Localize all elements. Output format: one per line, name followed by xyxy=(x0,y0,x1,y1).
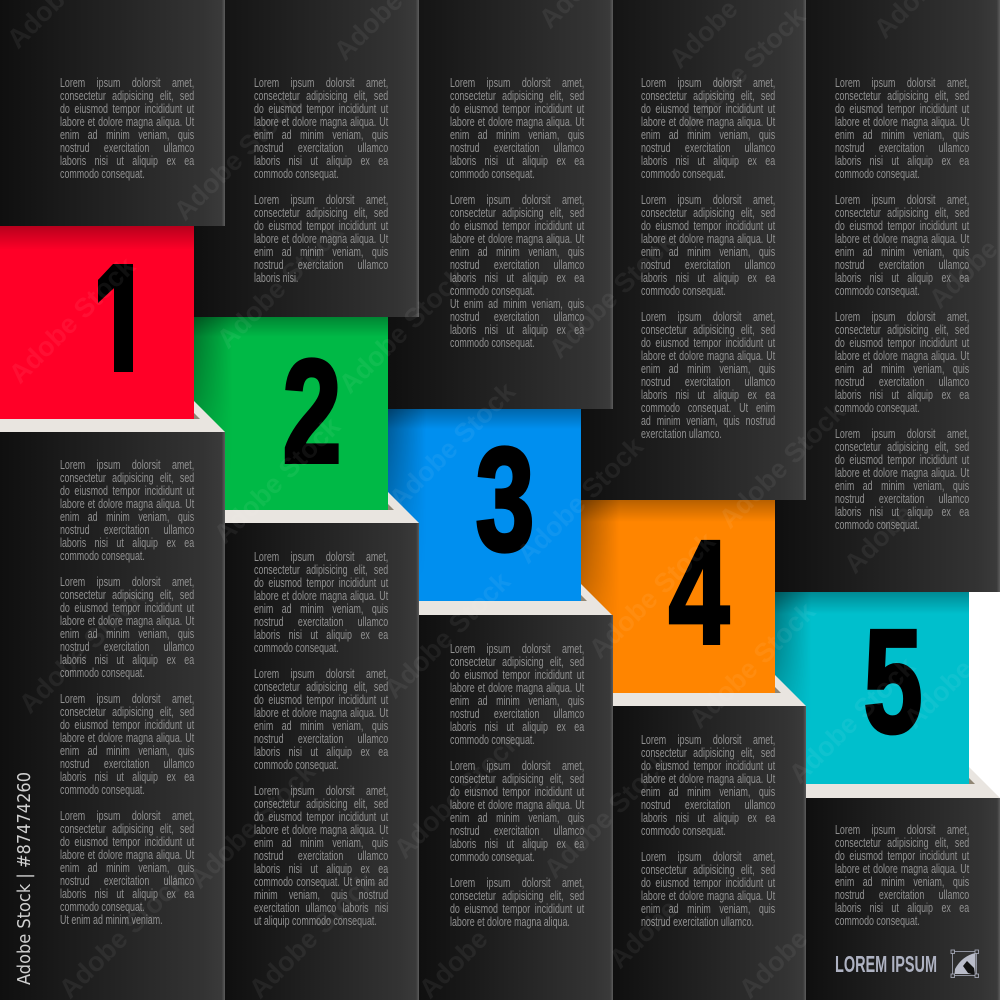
text: panel 4 top: labore et dolore magna aliqua. Ut xyxy=(641,232,775,246)
text: panel 1 top: laboris nisi ut aliquip ex ea xyxy=(60,154,194,168)
text: panel 2 bottom: minim veniam, quis nostrud xyxy=(254,888,388,902)
watermarks: Adobe Stock xyxy=(333,261,472,399)
text: panel 2 bottom: laboris nisi ut aliquip ex ea xyxy=(254,628,388,642)
text: panel 5 top: laboris nisi ut aliquip ex ea xyxy=(835,388,969,402)
top panel 2 xyxy=(194,0,419,317)
text: panel 4 top: nostrud exercitation ullamco xyxy=(641,141,775,155)
text: panel 1 bottom: nostrud exercitation ullamco xyxy=(60,522,194,536)
text: panel 1 bottom: laboris nisi ut aliquip ex ea xyxy=(60,536,194,550)
text: panel 2 top: enim ad minim veniam, quis xyxy=(254,245,388,259)
text: panel 3 bottom: Lorem ipsum dolorsit amet, xyxy=(450,876,584,890)
text: panel 4 top: do eiusmod tempor incididunt ut xyxy=(641,102,775,116)
text: panel 4 top: laboris nisi ut aliquip ex ea xyxy=(641,271,775,285)
text: panel 5 top: commodo consequat. xyxy=(835,284,920,298)
bottom panel 3 xyxy=(419,615,613,1000)
text: panel 2 top: consectetur adipisicing elit, sed xyxy=(254,89,388,103)
text: panel 4 bottom: consectetur adipisicing elit, sed xyxy=(641,862,775,876)
text: panel 3 bottom xyxy=(450,642,584,928)
step 1 column xyxy=(0,0,225,1000)
text: panel 2 bottom: commodo consequat. xyxy=(254,640,339,654)
text: panel 3 bottom: consectetur adipisicing elit, sed xyxy=(450,772,584,786)
text: panel 2 bottom: labore et dolore magna aliqua. Ut xyxy=(254,822,388,836)
watermarks: Adobe Stock xyxy=(783,651,922,789)
text: panel 4 bottom: consectetur adipisicing elit, sed xyxy=(641,746,775,760)
text: panel 3 bottom: enim ad minim veniam, quis xyxy=(450,810,584,824)
watermarks: Adobe Stock xyxy=(211,216,350,354)
text: panel 3 top: nostrud exercitation ullamco xyxy=(450,310,584,324)
text: panel 3 bottom: Lorem ipsum dolorsit amet, xyxy=(450,642,584,656)
number 2: 2 xyxy=(283,330,341,494)
white ledge 2 xyxy=(194,492,419,523)
text: panel 3 top: nostrud exercitation ullamco xyxy=(450,141,584,155)
text: panel 1 top: commodo consequat. xyxy=(60,167,145,181)
text: panel 4 bottom: do eiusmod tempor incididunt ut xyxy=(641,758,775,772)
number 1: 1 xyxy=(77,239,159,404)
text: panel 2 top: labore et dolore magna aliqua. Ut xyxy=(254,115,388,129)
text: panel 1 top: do eiusmod tempor incididunt ut xyxy=(60,102,194,116)
text: panel 3 bottom: enim ad minim veniam, quis xyxy=(450,694,584,708)
text: panel 5 top: nostrud exercitation ullamco xyxy=(835,492,969,506)
watermarks: Adobe Stock xyxy=(13,581,152,719)
text: panel 5 top: do eiusmod tempor incididunt ut xyxy=(835,336,969,350)
text: panel 2 bottom: commodo consequat. Ut enim ad xyxy=(254,874,388,888)
step 5 column xyxy=(775,0,1000,1000)
text: panel 5 bottom: do eiusmod tempor incididunt ut xyxy=(835,849,969,863)
text: panel 2 top: nostrud exercitation ullamco xyxy=(254,141,388,155)
text: panel 3 top: consectetur adipisicing elit, sed xyxy=(450,206,584,220)
text: panel 3 top: enim ad minim veniam, quis xyxy=(450,128,584,142)
text: panel 3 bottom: labore et dolore magna aliqua. xyxy=(450,914,570,928)
text: panel 1 bottom: nostrud exercitation ullamco xyxy=(60,756,194,770)
text: panel 3 top: commodo consequat. xyxy=(450,167,535,181)
text: panel 1 bottom: nostrud exercitation ullamco xyxy=(60,640,194,654)
text: panel 1 top: labore et dolore magna aliqua. Ut xyxy=(60,115,194,129)
white ledge 1 xyxy=(0,401,225,432)
text: panel 4 top: enim ad minim veniam, quis xyxy=(641,245,775,259)
text: panel 5 top: nostrud exercitation ullamco xyxy=(835,375,969,389)
text: panel 1 bottom: labore et dolore magna aliqua. Ut xyxy=(60,848,194,862)
text: panel 2 bottom: laboris nisi ut aliquip ex ea xyxy=(254,744,388,758)
text: panel 2 top xyxy=(254,76,388,285)
text: panel 4 bottom: labore et dolore magna aliqua. Ut xyxy=(641,888,775,902)
number 4: 4 xyxy=(669,511,729,675)
text: panel 2 top: commodo consequat. xyxy=(254,167,339,181)
text: panel 3 bottom: nostrud exercitation ullamco xyxy=(450,824,584,838)
text: panel 5 top: labore et dolore magna aliqua. Ut xyxy=(835,349,969,363)
text: panel 4 top: commodo consequat. Ut enim xyxy=(641,401,775,415)
vertical stock id: Adobe Stock | #87474260 xyxy=(14,772,35,985)
text: panel 1 bottom: labore et dolore magna aliqua. Ut xyxy=(60,496,194,510)
text: panel 4 bottom: laboris nisi ut aliquip ex ea xyxy=(641,810,775,824)
text: panel 4 bottom: do eiusmod tempor incididunt ut xyxy=(641,876,775,890)
text: panel 1 bottom: enim ad minim veniam, quis xyxy=(60,860,194,874)
white ledge 4 xyxy=(581,675,806,706)
text: panel 2 bottom: consectetur adipisicing elit, sed xyxy=(254,796,388,810)
text: panel 5 top: consectetur adipisicing elit, sed xyxy=(835,323,969,337)
text: panel 1 top xyxy=(60,76,194,181)
text: panel 5 top: nostrud exercitation ullamco xyxy=(835,141,969,155)
text: panel 5 top: Lorem ipsum dolorsit amet, xyxy=(835,310,969,324)
text: panel 1 bottom: Lorem ipsum dolorsit amet, xyxy=(60,458,194,472)
text: panel 2 bottom: enim ad minim veniam, quis xyxy=(254,718,388,732)
watermarks: Adobe Stock xyxy=(683,596,822,734)
text: panel 5 bottom: commodo consequat. xyxy=(835,914,920,928)
text: panel 2 top: labore et dolore magna aliqua. Ut xyxy=(254,232,388,246)
watermarks: Adobe Stock xyxy=(538,746,677,884)
text: panel 5 top: do eiusmod tempor incididunt ut xyxy=(835,102,969,116)
text: panel 1 bottom: enim ad minim veniam, quis xyxy=(60,510,194,524)
white ledge 5 xyxy=(775,767,1000,798)
text: panel 4 top: Lorem ipsum dolorsit amet, xyxy=(641,193,775,207)
text: panel 5 top: enim ad minim veniam, quis xyxy=(835,362,969,376)
text: panel 5 top: consectetur adipisicing elit, sed xyxy=(835,440,969,454)
text: panel 5 bottom: consectetur adipisicing elit, sed xyxy=(835,836,969,850)
text: panel 5 top: commodo consequat. xyxy=(835,518,920,532)
text: panel 3 top: Lorem ipsum dolorsit amet, xyxy=(450,76,584,90)
text: panel 2 bottom: laboris nisi ut aliquip ex ea xyxy=(254,862,388,876)
watermarks: Adobe xyxy=(603,894,684,974)
step 3 column xyxy=(388,0,613,1000)
bottom panel 4 xyxy=(612,706,806,1000)
text: panel 5 top: consectetur adipisicing elit, sed xyxy=(835,206,969,220)
text: panel 2 bottom: consectetur adipisicing elit, sed xyxy=(254,680,388,694)
text: panel 2 bottom xyxy=(254,550,388,928)
text: panel 2 top: nostrud exercitation ullamco xyxy=(254,258,388,272)
text: panel 1 bottom: enim ad minim veniam, quis xyxy=(60,626,194,640)
bottom panel 2 xyxy=(225,523,419,1000)
text: panel 3 bottom: Lorem ipsum dolorsit amet, xyxy=(450,758,584,772)
text: panel 4 top: labore et dolore magna aliqua. Ut xyxy=(641,115,775,129)
text: panel 4 top: consectetur adipisicing elit, sed xyxy=(641,323,775,337)
text: panel 5 top xyxy=(835,76,970,532)
text: panel 1 bottom: commodo consequat. xyxy=(60,548,145,562)
text: panel 2 bottom: consectetur adipisicing elit, sed xyxy=(254,562,388,576)
text: panel 3 bottom: labore et dolore magna aliqua. Ut xyxy=(450,680,584,694)
text: panel 2 bottom: do eiusmod tempor incididunt ut xyxy=(254,576,388,590)
text: panel 3 bottom: laboris nisi ut aliquip ex ea xyxy=(450,720,584,734)
text: panel 3 top: Lorem ipsum dolorsit amet, xyxy=(450,193,584,207)
text: panel 3 bottom: laboris nisi ut aliquip ex ea xyxy=(450,836,584,850)
watermarks: Adobe Stock xyxy=(168,88,307,226)
text: panel 2 top: enim ad minim veniam, quis xyxy=(254,128,388,142)
text: panel 5 top: enim ad minim veniam, quis xyxy=(835,479,969,493)
text: panel 3 top: do eiusmod tempor incididunt ut xyxy=(450,219,584,233)
text: panel 2 bottom: exercitation ullamco laboris nisi xyxy=(254,900,388,914)
text: panel 5 top: Lorem ipsum dolorsit amet, xyxy=(835,193,969,207)
watermarks: Adobe Stock xyxy=(583,526,722,664)
top panel 1 xyxy=(0,0,225,226)
colour block 2 xyxy=(194,317,388,510)
text: panel 5 bottom xyxy=(835,823,970,928)
text: panel 4 top: laboris nisi ut aliquip ex ea xyxy=(641,154,775,168)
watermarks: Adobe Stock xyxy=(511,431,650,569)
text: panel 1 top: nostrud exercitation ullamco xyxy=(60,141,194,155)
text: panel 3 top xyxy=(450,76,584,350)
step 4 column xyxy=(581,0,806,1000)
text: panel 3 bottom: do eiusmod tempor incididunt ut xyxy=(450,902,584,916)
colour block 3 xyxy=(388,409,581,601)
text: panel 2 top: consectetur adipisicing elit, sed xyxy=(254,206,388,220)
text: panel 3 bottom: do eiusmod tempor incididunt ut xyxy=(450,668,584,682)
colour block 4 xyxy=(581,500,775,693)
top panel 5 xyxy=(775,0,1000,592)
text: panel 1 bottom: do eiusmod tempor incididunt ut xyxy=(60,484,194,498)
text: panel 4 top: consectetur adipisicing elit, sed xyxy=(641,89,775,103)
text: panel 5 top: enim ad minim veniam, quis xyxy=(835,245,969,259)
step 2 column xyxy=(194,0,419,1000)
text: panel 1 bottom: enim ad minim veniam, quis xyxy=(60,744,194,758)
text: panel 1 bottom: do eiusmod tempor incididunt ut xyxy=(60,834,194,848)
text: panel 1 bottom: do eiusmod tempor incididunt ut xyxy=(60,600,194,614)
text: panel 1 top: Lorem ipsum dolorsit amet, xyxy=(60,76,194,90)
watermarks: Adobe Stock xyxy=(3,251,142,389)
top panel 4 xyxy=(581,0,806,500)
text: panel 1 bottom: consectetur adipisicing elit, sed xyxy=(60,822,194,836)
text: panel 3 bottom: do eiusmod tempor incididunt ut xyxy=(450,784,584,798)
text: panel 3 bottom: consectetur adipisicing elit, sed xyxy=(450,888,584,902)
text: panel 2 bottom: do eiusmod tempor incididunt ut xyxy=(254,692,388,706)
text: panel 4 bottom: enim ad minim veniam, quis xyxy=(641,902,775,916)
text: panel 3 top: laboris nisi ut aliquip ex ea xyxy=(450,323,584,337)
text: panel 3 top: enim ad minim veniam, quis xyxy=(450,245,584,259)
text: panel 1 bottom: Lorem ipsum dolorsit amet, xyxy=(60,692,194,706)
watermarks: Adobe Stock xyxy=(383,376,522,514)
bottom panel 5 xyxy=(806,798,1000,1000)
text: panel 5 bottom: laboris nisi ut aliquip ex ea xyxy=(835,901,969,915)
text: panel 4 bottom: commodo consequat. xyxy=(641,824,726,838)
text: panel 2 bottom: labore et dolore magna aliqua. Ut xyxy=(254,588,388,602)
text: panel 4 bottom: nostrud exercitation ullamco xyxy=(641,798,775,812)
text: panel 3 top: consectetur adipisicing elit, sed xyxy=(450,89,584,103)
colour block 1 xyxy=(0,226,194,419)
text: panel 1 bottom: consectetur adipisicing elit, sed xyxy=(60,470,194,484)
text: panel 1 bottom: laboris nisi ut aliquip ex ea xyxy=(60,770,194,784)
text: panel 4 top: Lorem ipsum dolorsit amet, xyxy=(641,310,775,324)
text: panel 4 bottom: Lorem ipsum dolorsit amet, xyxy=(641,732,775,746)
text: panel 2 bottom: labore et dolore magna aliqua. Ut xyxy=(254,706,388,720)
white ledge 3 xyxy=(388,584,612,615)
text: panel 5 top: labore et dolore magna aliqua. Ut xyxy=(835,466,969,480)
text: panel 2 top: laboris nisi. xyxy=(254,271,298,285)
top panel 3 xyxy=(388,0,613,409)
text: panel 3 top: commodo consequat. xyxy=(450,284,535,298)
bottom panel 1 xyxy=(0,432,225,1000)
text: panel 2 top: laboris nisi ut aliquip ex ea xyxy=(254,154,388,168)
text: panel 5 top: commodo consequat. xyxy=(835,167,920,181)
text: panel 2 top: do eiusmod tempor incididunt ut xyxy=(254,102,388,116)
icon: pen tool logo xyxy=(951,950,978,978)
text: panel 3 top: nostrud exercitation ullamco xyxy=(450,258,584,272)
text: panel 1 bottom: commodo consequat. xyxy=(60,782,145,796)
text: panel 3 top: labore et dolore magna aliqua. Ut xyxy=(450,115,584,129)
text: panel 2 bottom: commodo consequat. xyxy=(254,758,339,772)
text: panel 4 bottom: Lorem ipsum dolorsit amet, xyxy=(641,850,775,864)
text: panel 2 bottom: Lorem ipsum dolorsit amet, xyxy=(254,666,388,680)
text: panel 2 bottom: do eiusmod tempor incididunt ut xyxy=(254,810,388,824)
text: panel 4 top xyxy=(641,76,776,441)
text: panel 3 top: commodo consequat. xyxy=(450,336,535,350)
text: panel 5 top: Lorem ipsum dolorsit amet, xyxy=(835,76,969,90)
text: panel 1 bottom: Lorem ipsum dolorsit amet, xyxy=(60,808,194,822)
text: panel 2 bottom: enim ad minim veniam, quis xyxy=(254,836,388,850)
text: panel 5 top: laboris nisi ut aliquip ex ea xyxy=(835,154,969,168)
text: panel 3 top: labore et dolore magna aliqua. Ut xyxy=(450,232,584,246)
text: panel 4 top: do eiusmod tempor incididunt ut xyxy=(641,219,775,233)
text: panel 5 bottom: nostrud exercitation ullamco xyxy=(835,888,969,902)
text: panel 2 top: do eiusmod tempor incididunt ut xyxy=(254,219,388,233)
text: panel 4 top: commodo consequat. xyxy=(641,167,726,181)
text: panel 1 bottom: laboris nisi ut aliquip ex ea xyxy=(60,886,194,900)
text: panel 2 bottom: ut aliquip commodo consequat. xyxy=(254,914,377,928)
text: panel 2 top: Lorem ipsum dolorsit amet, xyxy=(254,193,388,207)
text: panel 2 bottom: Lorem ipsum dolorsit amet, xyxy=(254,550,388,564)
text: panel 3 bottom: commodo consequat. xyxy=(450,732,535,746)
text: panel 4 top: labore et dolore magna aliqua. Ut xyxy=(641,349,775,363)
text: panel 1 bottom: commodo consequat. xyxy=(60,900,145,914)
text: panel 1 top: enim ad minim veniam, quis xyxy=(60,128,194,142)
watermarks: Adobe Stock xyxy=(378,566,517,704)
text: panel 2 bottom: enim ad minim veniam, quis xyxy=(254,602,388,616)
logo text: LOREM IPSUM xyxy=(835,951,937,977)
text: panel 5 top: labore et dolore magna aliqua. Ut xyxy=(835,232,969,246)
text: panel 1 bottom: nostrud exercitation ullamco xyxy=(60,874,194,888)
text: panel 1 bottom: Ut enim ad minim veniam. xyxy=(60,912,163,926)
text: panel 4 bottom xyxy=(641,732,776,928)
text: panel 3 bottom: consectetur adipisicing elit, sed xyxy=(450,654,584,668)
watermarks: Adobe Stock xyxy=(388,726,527,864)
text: panel 5 top: enim ad minim veniam, quis xyxy=(835,128,969,142)
text: panel 1 bottom: labore et dolore magna aliqua. Ut xyxy=(60,730,194,744)
number 5: 5 xyxy=(864,600,922,764)
text: panel 5 top: laboris nisi ut aliquip ex ea xyxy=(835,505,969,519)
text: panel 5 top: do eiusmod tempor incididunt ut xyxy=(835,219,969,233)
text: panel 1 bottom xyxy=(60,458,194,926)
text: panel 4 top: laboris nisi ut aliquip ex ea xyxy=(641,388,775,402)
watermarks: Adobe Stock xyxy=(543,226,682,364)
text: panel 5 bottom: Lorem ipsum dolorsit amet, xyxy=(835,823,969,837)
text: panel 1 top: consectetur adipisicing elit, sed xyxy=(60,89,194,103)
text: panel 3 top: laboris nisi ut aliquip ex ea xyxy=(450,154,584,168)
text: panel 1 bottom: laboris nisi ut aliquip ex ea xyxy=(60,652,194,666)
text: panel 4 top: enim ad minim veniam, quis xyxy=(641,128,775,142)
text: panel 1 bottom: do eiusmod tempor incididunt ut xyxy=(60,718,194,732)
text: panel 2 bottom: nostrud exercitation ullamco xyxy=(254,614,388,628)
text: panel 3 top: laboris nisi ut aliquip ex ea xyxy=(450,271,584,285)
text: panel 5 top: commodo consequat. xyxy=(835,401,920,415)
text: panel 2 top: Lorem ipsum dolorsit amet, xyxy=(254,76,388,90)
text: panel 5 top: Lorem ipsum dolorsit amet, xyxy=(835,427,969,441)
text: panel 5 top: labore et dolore magna aliqua. Ut xyxy=(835,115,969,129)
text: panel 2 bottom: nostrud exercitation ullamco xyxy=(254,732,388,746)
text: panel 4 bottom: labore et dolore magna aliqua. Ut xyxy=(641,772,775,786)
number 3: 3 xyxy=(476,418,534,582)
text: panel 4 bottom: enim ad minim veniam, quis xyxy=(641,784,775,798)
text: panel 5 bottom: enim ad minim veniam, quis xyxy=(835,875,969,889)
watermarks: Adobe Stock xyxy=(713,396,852,534)
text: panel 1 bottom: consectetur adipisicing elit, sed xyxy=(60,704,194,718)
number 1 xyxy=(98,264,133,372)
text: panel 4 top: nostrud exercitation ullamco xyxy=(641,258,775,272)
watermarks: Adobe Stock xyxy=(673,1,812,139)
text: panel 5 top: consectetur adipisicing elit, sed xyxy=(835,89,969,103)
text: panel 3 bottom: nostrud exercitation ullamco xyxy=(450,706,584,720)
text: panel 4 top: consectetur adipisicing elit, sed xyxy=(641,206,775,220)
text: panel 3 bottom: labore et dolore magna aliqua. Ut xyxy=(450,798,584,812)
text: panel 4 top: Lorem ipsum dolorsit amet, xyxy=(641,76,775,90)
text: panel 5 top: do eiusmod tempor incididunt ut xyxy=(835,453,969,467)
text: panel 1 bottom: commodo consequat. xyxy=(60,666,145,680)
watermarks: Adobe xyxy=(838,499,919,579)
text: panel 4 top: commodo consequat. xyxy=(641,284,726,298)
colour block 5 xyxy=(775,592,969,784)
text: panel 4 top: enim ad minim veniam, quis xyxy=(641,362,775,376)
text: panel 4 top: nostrud exercitation ullamco xyxy=(641,375,775,389)
text: panel 4 top: exercitation ullamco. xyxy=(641,427,722,441)
text: panel 2 bottom: nostrud exercitation ullamco xyxy=(254,848,388,862)
text: panel 5 bottom: labore et dolore magna aliqua. Ut xyxy=(835,862,969,876)
text: panel 5 top: laboris nisi ut aliquip ex ea xyxy=(835,271,969,285)
text: panel 3 bottom: commodo consequat. xyxy=(450,850,535,864)
watermarks: Adobe Stock xyxy=(208,411,347,549)
text: panel 5 top: nostrud exercitation ullamco xyxy=(835,258,969,272)
text: panel 3 top: Ut enim ad minim veniam, quis xyxy=(450,297,584,311)
text: panel 4 top: do eiusmod tempor incididunt ut xyxy=(641,336,775,350)
text: panel 1 bottom: labore et dolore magna aliqua. Ut xyxy=(60,614,194,628)
text: panel 1 bottom: Lorem ipsum dolorsit amet, xyxy=(60,574,194,588)
watermarks: Adobe Stock xyxy=(183,756,322,894)
text: panel 4 top: ad minim veniam, quis nostrud xyxy=(641,414,775,428)
text: panel 3 top: do eiusmod tempor incididunt ut xyxy=(450,102,584,116)
text: panel 2 bottom: Lorem ipsum dolorsit amet, xyxy=(254,784,388,798)
text: panel 1 bottom: consectetur adipisicing elit, sed xyxy=(60,588,194,602)
text: panel 4 bottom: nostrud exercitation ullamco. xyxy=(641,914,754,928)
